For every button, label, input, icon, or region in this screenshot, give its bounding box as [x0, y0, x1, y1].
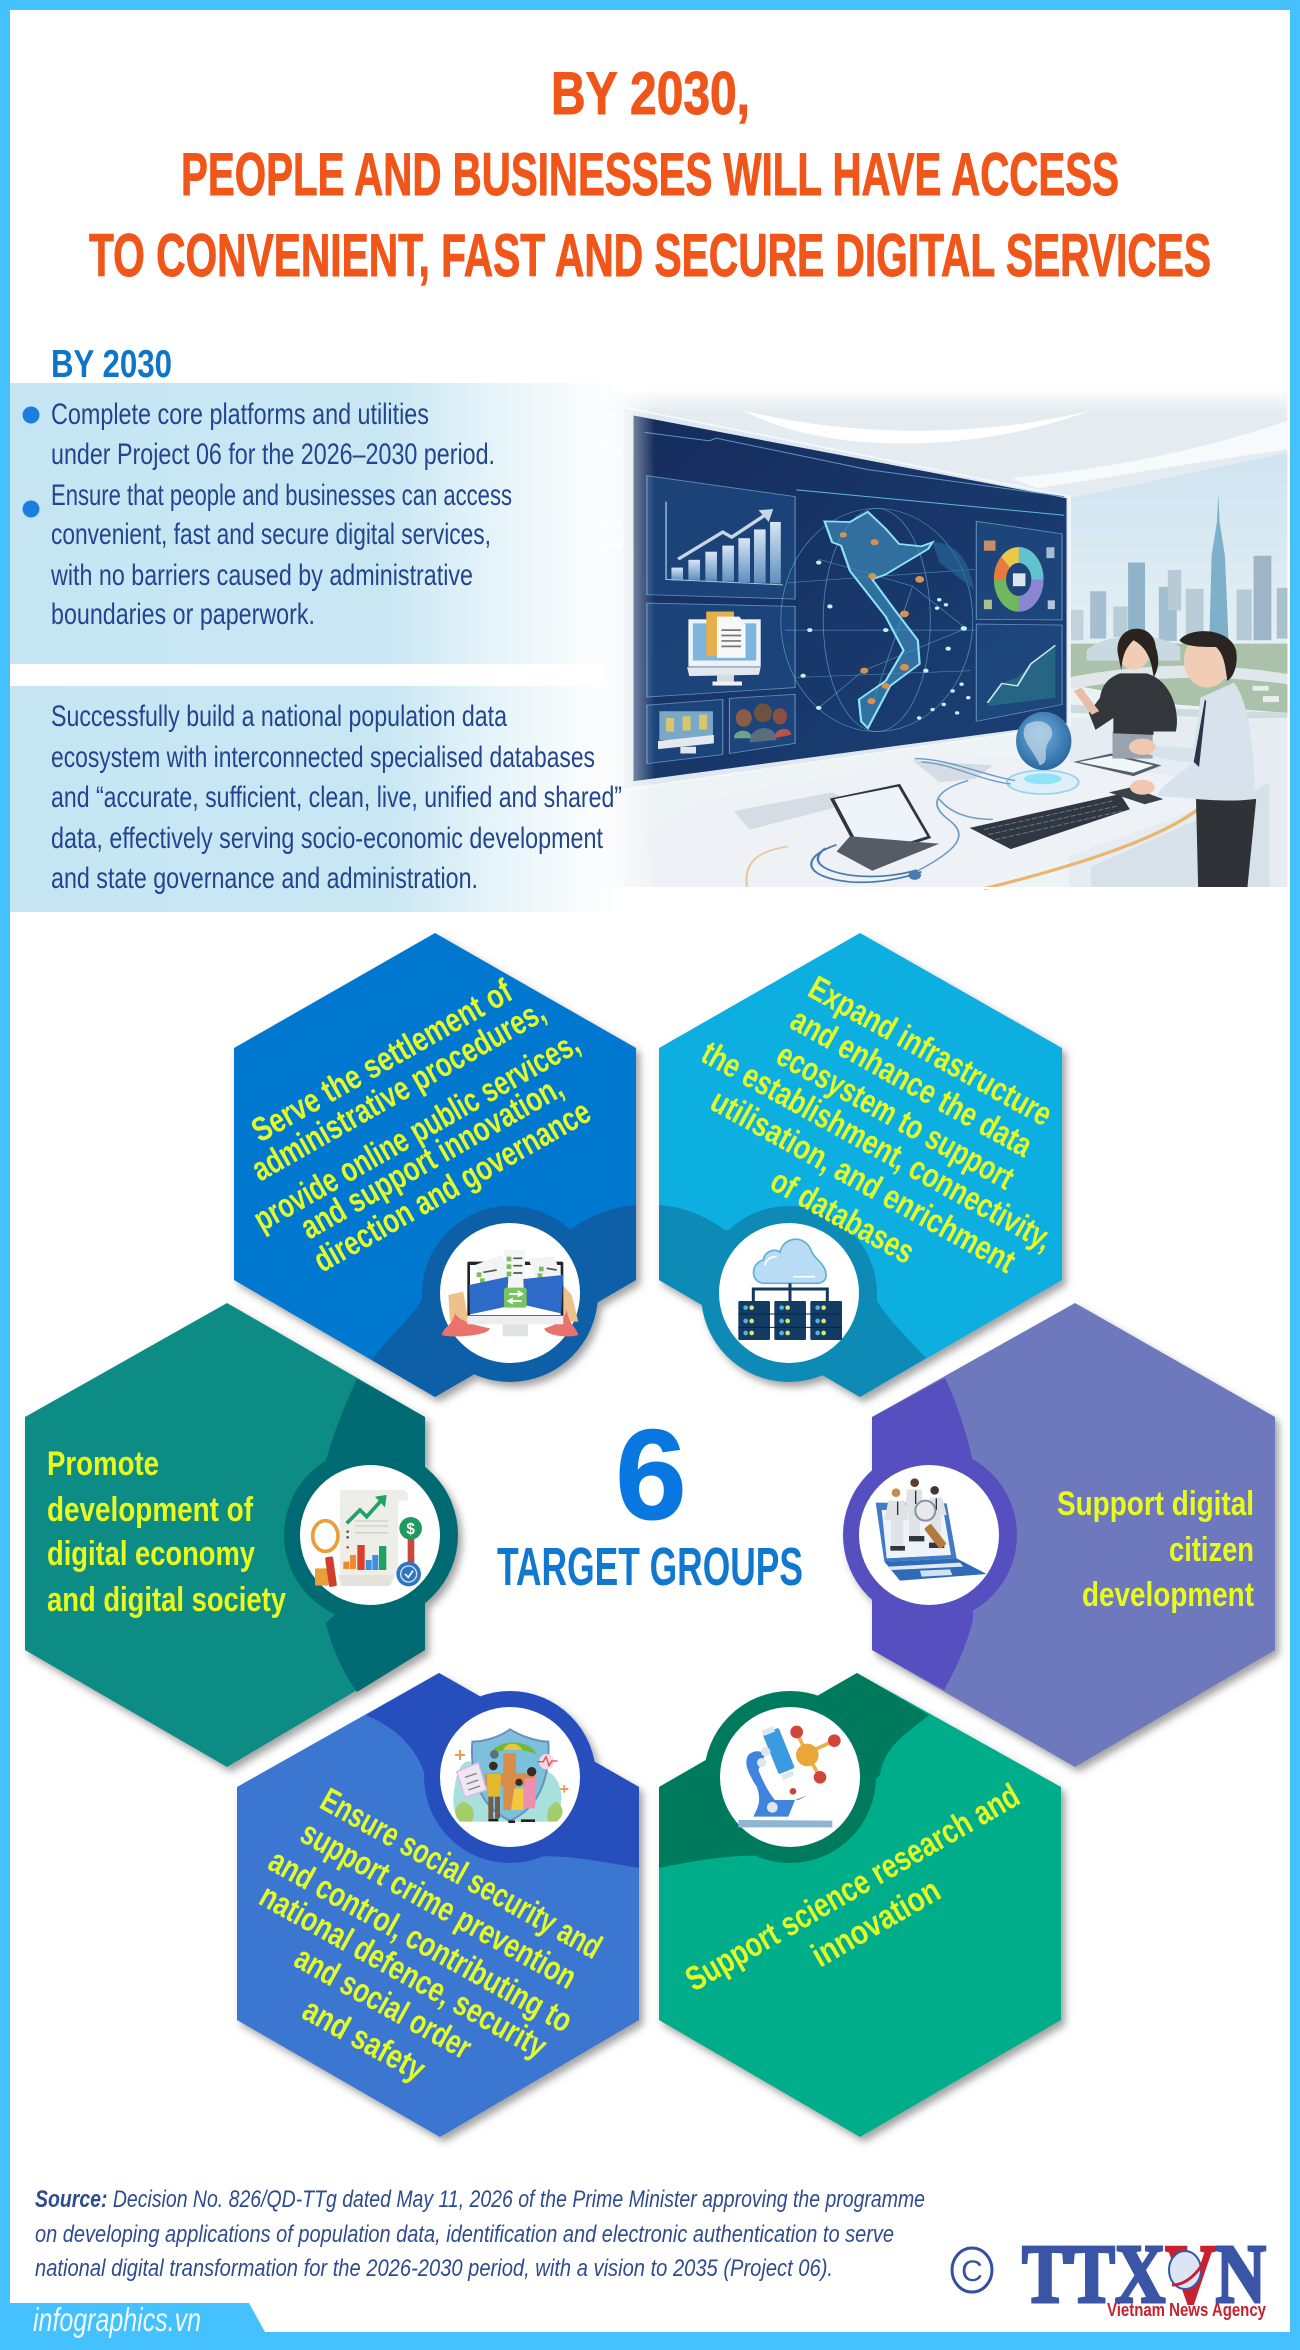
- bullet: second goal: [22, 500, 40, 518]
- illustration: officials at a national data dashboard: [600, 390, 1287, 889]
- source note: Source: Decision No. 826/QD-TTg dated May 11, 2026 of the Prime Minister approving the programme: [35, 2186, 925, 2213]
- copyright mark: C: [961, 2255, 983, 2288]
- text: group 2: of databases: [764, 1162, 921, 1272]
- text: goals: boundaries or paperwork.: [51, 598, 315, 631]
- text: group 5: support crime prevention: [294, 1814, 583, 1997]
- text: group 4: Support digital: [1057, 1485, 1254, 1523]
- text: group 4: [1057, 1485, 1254, 1614]
- center heading: 6 target groups: TARGET GROUPS: [497, 1537, 803, 1597]
- text: group 1: provide online public services,: [247, 1024, 586, 1239]
- text: data ecosystem: and “accurate, sufficient, clean, live, unified and shared”: [51, 781, 622, 814]
- target group 3: digital economy: [25, 1303, 458, 1767]
- target group 5: social security: [237, 1673, 639, 2137]
- panel: by 2030 goals: [10, 383, 620, 664]
- target group 6: science and innovation: [659, 1673, 1061, 2137]
- text: data ecosystem: data, effectively serving socio-economic development: [51, 822, 603, 855]
- hexagon with dark corner and ring: [659, 1673, 1061, 2137]
- icon circle: family under a shield: [440, 1707, 580, 1847]
- section heading: BY 2030: BY 2030: [51, 343, 172, 386]
- text: group 2: and enhance the data: [784, 1001, 1039, 1165]
- text: group 4: citizen: [1169, 1531, 1254, 1569]
- text: goals: [50, 398, 512, 631]
- center heading: 6 target groups: 6: [615, 1404, 687, 1547]
- title: [89, 60, 1211, 289]
- text: group 6: Support science research and: [679, 1777, 1026, 1999]
- text: group 3: Promote: [47, 1445, 159, 1483]
- source note: national digital transformation for the 2026-2030 period, with a vision to 2035 (Project 06).: [35, 2255, 833, 2282]
- text: group 2: [695, 969, 1059, 1281]
- target group 1: administrative procedures: [234, 933, 636, 1397]
- text: data ecosystem: [51, 700, 622, 895]
- text: group 6: innovation: [805, 1871, 947, 1975]
- footer tab: infographics.vn: [33, 2301, 201, 2338]
- text: data ecosystem: Successfully build a national population data: [51, 700, 507, 733]
- title: BY 2030,: [551, 60, 750, 127]
- text: group 2: Expand infrastructure: [802, 969, 1058, 1134]
- source note: on developing applications of population data, identification and electronic authentication to serve: [35, 2221, 894, 2248]
- text: group 2: ecosystem to support: [770, 1036, 1020, 1197]
- text: group 2: the establishment, connectivity,: [695, 1034, 1059, 1258]
- icon circle: financial report: $: [406, 1521, 415, 1538]
- text: group 1: administrative procedures,: [245, 992, 552, 1189]
- text: group 1: direction and governance: [307, 1093, 597, 1280]
- text: group 4: development: [1082, 1576, 1254, 1614]
- text: goals: Complete core platforms and utilities: [51, 398, 429, 431]
- hexagon with dark corner and ring: [659, 933, 1062, 1397]
- text: group 3: [47, 1445, 286, 1619]
- image left edge fade: [600, 380, 655, 890]
- text: group 2: utilisation, and enrichment: [704, 1082, 1022, 1281]
- text: group 5: and control, contributing to: [262, 1842, 579, 2040]
- text: goals: under Project 06 for the 2026–2030 period.: [51, 438, 495, 471]
- logo: TTXVN Vietnam News Agency: TTXVN: [1022, 2228, 1266, 2321]
- text: group 5: Ensure social security and: [314, 1781, 608, 1967]
- icon circle: cloud and servers: [719, 1223, 859, 1363]
- text: group 3: and digital society: [47, 1581, 286, 1619]
- icon circle: microscope and molecule: [720, 1707, 860, 1847]
- text: group 1: [245, 972, 597, 1280]
- text: group 3: digital economy: [47, 1535, 255, 1573]
- source note: [35, 2186, 925, 2282]
- text: group 6: [679, 1777, 1026, 1999]
- hexagon with dark corner and ring: [237, 1673, 639, 2137]
- copyright mark: [952, 2248, 992, 2292]
- target group 2: infrastructure and data ecosystem: [659, 933, 1062, 1397]
- bullet: first goal: [22, 406, 40, 424]
- text: group 1: and support innovation,: [294, 1068, 569, 1247]
- panel: data ecosystem: [10, 686, 622, 912]
- hexagon with dark corner and ring: [234, 933, 636, 1397]
- hexagon with dark side and ring: [843, 1303, 1275, 1767]
- text: data ecosystem: and state governance and administration.: [51, 862, 478, 895]
- text: goals: convenient, fast and secure digital services,: [51, 518, 491, 551]
- text: data ecosystem: ecosystem with interconnected specialised databases: [51, 741, 595, 774]
- text: group 5: and safety: [296, 1991, 432, 2089]
- icon circle: financial report: [300, 1465, 440, 1605]
- image top edge fade: [600, 388, 1290, 412]
- center heading: 6 target groups: [497, 1404, 803, 1597]
- text: group 3: development of: [47, 1491, 254, 1529]
- target group 4: digital citizens: [843, 1303, 1275, 1767]
- hexagon with dark side and ring: [25, 1303, 458, 1767]
- logo: TTXVN Vietnam News Agency: Vietnam News Agency: [1107, 2300, 1266, 2320]
- text: group 5: [253, 1781, 608, 2089]
- text: group 1: Serve the settlement of: [245, 972, 519, 1150]
- footer tab: [0, 2301, 1300, 2350]
- icon circle: folders and computer: [440, 1223, 580, 1363]
- text: goals: Ensure that people and businesses can access: [51, 479, 512, 512]
- text: group 5: national defence, security: [253, 1877, 553, 2066]
- text: goals: with no barriers caused by administrative: [50, 559, 473, 592]
- text: group 5: and social order: [288, 1939, 478, 2067]
- icon circle: people on a laptop: [859, 1465, 999, 1605]
